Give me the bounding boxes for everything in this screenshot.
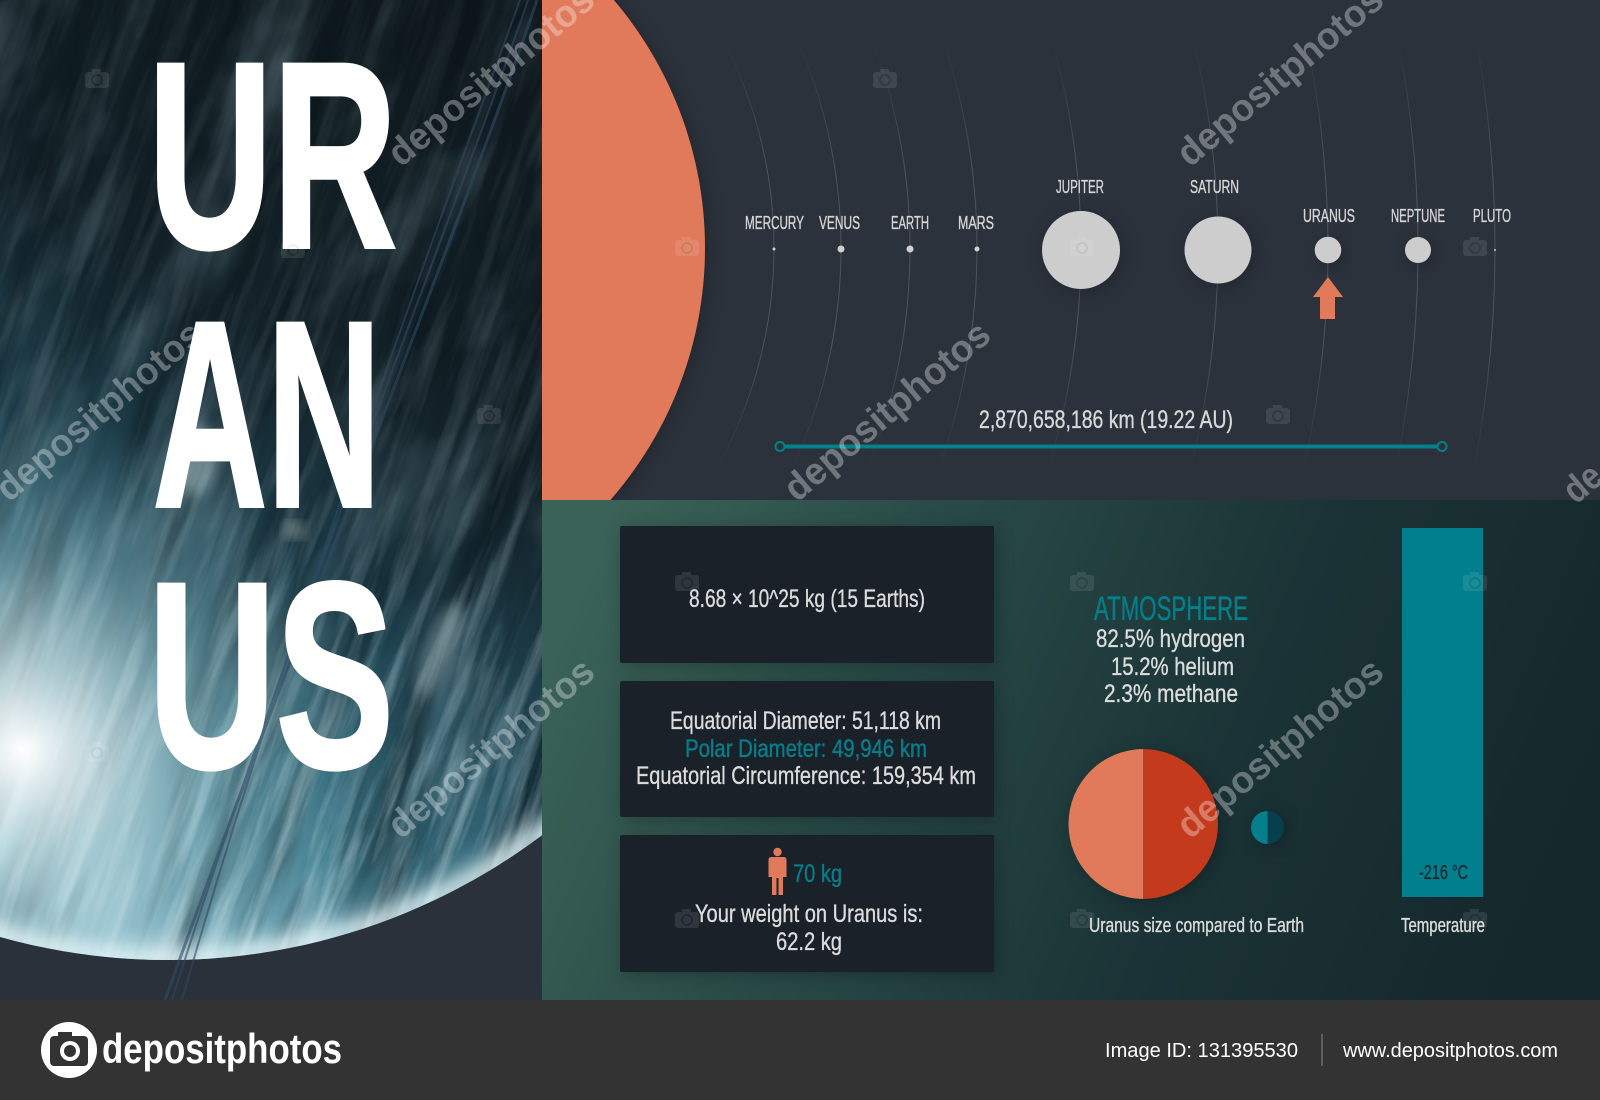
- watermark overlay: depositphotos: [380, 650, 603, 847]
- planet: Neptune: [1391, 206, 1445, 263]
- panel: solar system: [542, 0, 1600, 500]
- watermark overlay: depositphotos: [776, 313, 999, 510]
- panel: planet photo with title: [0, 0, 542, 1000]
- sun-like orange disc: [542, 0, 707, 500]
- card: diameters: Equatorial Circumference: 159,354 km: [636, 762, 976, 790]
- atmosphere block: 82.5% hydrogen: [1096, 625, 1245, 653]
- atmosphere block: ATMOSPHERE: [1094, 590, 1248, 628]
- website: www.depositphotos.com: [1342, 1040, 1558, 1062]
- size comparison: Uranus size compared to Earth: [1089, 915, 1304, 937]
- planet: Earth: [891, 213, 929, 252]
- temperature bar: [1401, 528, 1485, 937]
- Uranus disc: [1068, 749, 1218, 899]
- planet: Venus: VENUS: [819, 213, 860, 233]
- planet: Jupiter: JUPITER: [1056, 177, 1104, 197]
- card: mass: 8.68 × 10^25 kg (15 Earths): [689, 585, 925, 613]
- planet: Earth: EARTH: [891, 213, 929, 233]
- title: AN: [153, 267, 381, 563]
- card: weight: 70 kg: [793, 860, 842, 888]
- watermark overlay: [0, 0, 1600, 847]
- logo wordmark: depositphotos: [102, 1025, 342, 1072]
- card: diameters: Equatorial Diameter: 51,118 km: [670, 707, 941, 735]
- logo icon: [41, 1022, 97, 1078]
- planet: Neptune: NEPTUNE: [1391, 206, 1445, 226]
- card: weight: Your weight on Uranus is:: [695, 900, 923, 928]
- card: mass: [620, 526, 994, 663]
- planet: Jupiter: [1042, 177, 1120, 289]
- card: weight: [620, 835, 994, 972]
- atmosphere block: [1094, 590, 1248, 708]
- planet: Mercury: MERCURY: [745, 213, 804, 233]
- arrow pointing at Uranus: [1313, 277, 1343, 319]
- planet: Venus: [819, 213, 860, 252]
- planet: Saturn: [1184, 177, 1252, 284]
- planet: Pluto: [1473, 206, 1511, 251]
- watermark camera icons: [85, 69, 1487, 928]
- planet: Mars: MARS: [958, 213, 994, 233]
- card: diameters: Polar Diameter: 49,946 km: [685, 735, 927, 763]
- planet: Mercury: [745, 213, 804, 250]
- title: UR: [148, 8, 397, 304]
- image: Uranus surface: [0, 0, 542, 960]
- orbit lines: [732, 72, 1496, 438]
- title: [155, 62, 396, 772]
- planet: Mars: [958, 213, 994, 252]
- panel: facts: [542, 500, 1600, 1000]
- temperature bar: -216 °C: [1419, 862, 1468, 884]
- planet: Uranus: [1303, 206, 1355, 263]
- icon: person: [768, 848, 786, 895]
- planet: Uranus: URANUS: [1303, 206, 1355, 226]
- footer bar: [0, 1000, 1600, 1100]
- planet: Saturn: SATURN: [1190, 177, 1239, 197]
- Earth disc: [1251, 811, 1284, 844]
- temperature bar: Temperature: [1401, 915, 1485, 937]
- size comparison: [1068, 749, 1304, 937]
- atmosphere block: 15.2% helium: [1111, 653, 1234, 681]
- atmosphere block: 2.3% methane: [1104, 680, 1238, 708]
- card: weight: 62.2 kg: [776, 928, 842, 956]
- distance label: 2,870,658,186 km (19.22 AU): [979, 406, 1233, 434]
- image id: Image ID: 131395530: [1105, 1040, 1298, 1062]
- card: diameters: [620, 681, 994, 817]
- distance bar: [776, 442, 1446, 451]
- planet: Pluto: PLUTO: [1473, 206, 1511, 226]
- watermark overlay: depositphotos: [1169, 650, 1392, 847]
- planet rings: [165, 0, 537, 1000]
- title: US: [148, 528, 394, 824]
